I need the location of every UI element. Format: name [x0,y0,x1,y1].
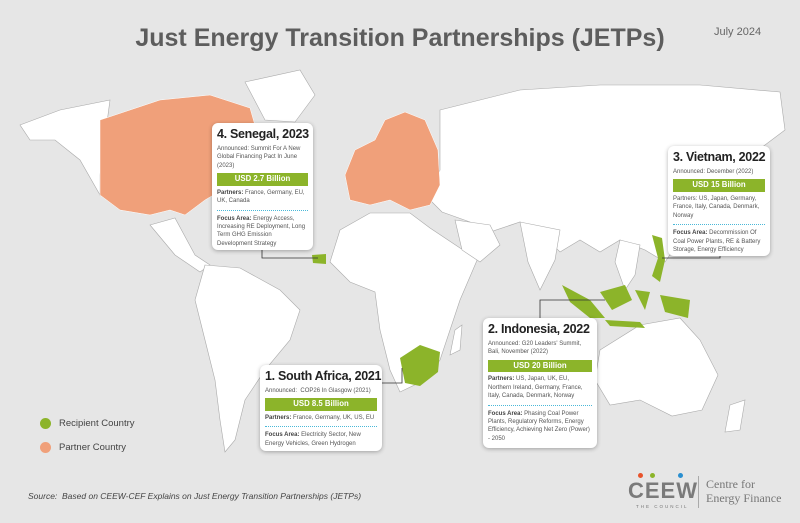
legend: Recipient Country [59,418,135,429]
legend: Partner Country [59,442,126,453]
logo [628,473,782,509]
card: Senegal: 4. Senegal, 2023 [217,127,309,141]
date: July 2024 [714,26,761,38]
card: Senegal [212,123,313,250]
card: Indonesia: Focus Area: Phasing Coal Power Plants, Regulatory Reforms, Energy Efficiency, Achieving Net Zero (Power) - 2050 [488,411,590,442]
card: Senegal: Focus Area: Energy Access, Increasing RE Deployment, Long Term GHG Emission Development Strategy [217,216,305,247]
card: Indonesia: 2. Indonesia, 2022 [488,322,590,336]
logo: THE COUNCIL [636,504,689,509]
card: Senegal: USD 2.7 Billion [235,174,290,183]
source: Source: Based on CEEW-CEF Explains on Just Energy Transition Partnerships (JETPs) [28,491,361,501]
card: Vietnam: Focus Area: Decommission Of Coal Power Plants, RE & Battery Storage, Energy Efficiency [673,230,760,253]
card: Vietnam: 3. Vietnam, 2022 [673,150,765,164]
card: South Africa: Focus Area: Electricity Sector, New Energy Vehicles, Green Hydrogen [265,432,361,447]
card: Senegal: Partners: France, Germany, EU, UK, Canada [217,190,305,204]
card: Indonesia: USD 20 Billion [513,361,567,370]
card: Senegal: Announced: Summit For A New Global Financing Pact In June (2023) [217,146,300,169]
logo: Centre for [706,477,755,491]
logo: Energy Finance [706,491,781,505]
card: Vietnam: USD 15 Billion [692,180,746,189]
title: Just Energy Transition Partnerships (JETPs) [135,24,665,52]
card: Vietnam: Partners: US, Japan, Germany, France, Italy, Canada, Denmark, Norway [673,196,759,219]
logo: CEEW [628,478,698,503]
card: Vietnam: Announced: December (2022) [673,169,753,175]
legend [40,418,135,453]
card: South Africa [260,365,382,451]
card: Indonesia: Announced: G20 Leaders' Summit, Bali, November (2022) [488,341,581,355]
card: South Africa: 1. South Africa, 2021 [265,369,381,383]
card: Indonesia: Partners: US, Japan, UK, EU, Northern Ireland, Germany, France, Italy, Canada, Denmark, Norway [488,376,583,399]
card: Indonesia [483,318,597,448]
card: South Africa: Announced: COP26 In Glasgow (2021) [265,388,371,394]
card: South Africa: Partners: France, Germany, UK, US, EU [265,415,374,421]
card: South Africa: USD 8.5 Billion [293,399,349,408]
card: Vietnam [668,146,770,256]
